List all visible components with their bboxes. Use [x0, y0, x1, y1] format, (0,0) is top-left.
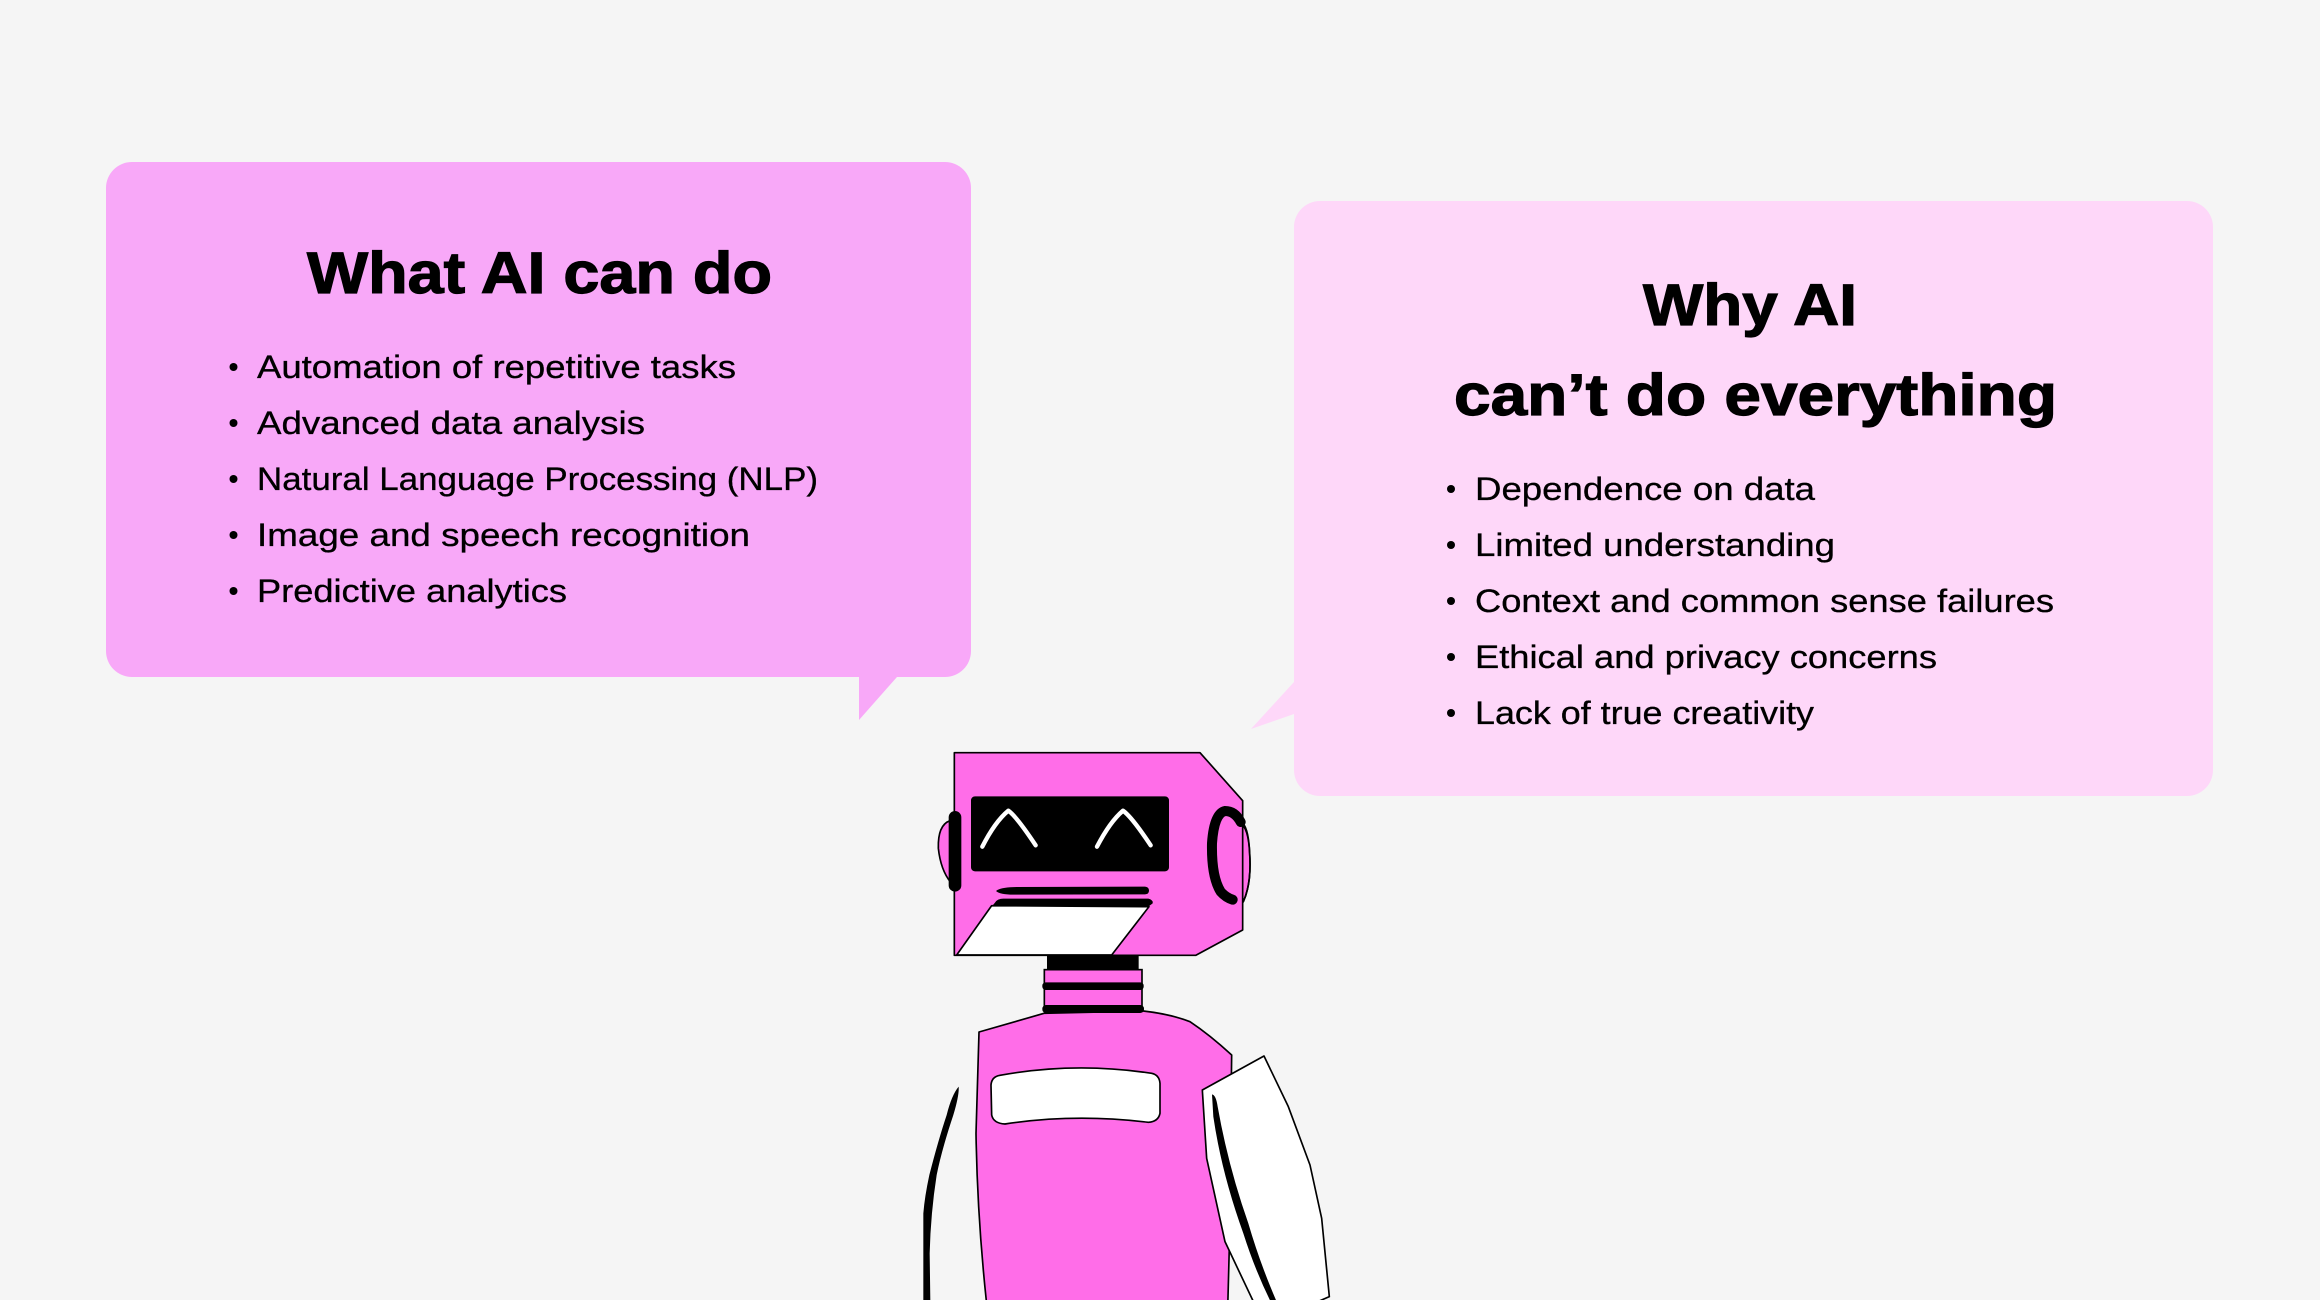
jaw — [957, 906, 1149, 955]
list: AI capabilities: Image and speech recognition — [257, 517, 750, 553]
neck band lower — [1042, 1005, 1144, 1013]
list: AI capabilities: Advanced data analysis — [257, 405, 645, 441]
list: AI capabilities — [230, 349, 818, 609]
list: AI limitations: Lack of true creativity — [1475, 695, 1814, 731]
speech bubble: why AI can't do everything — [1251, 201, 2213, 796]
right eye — [1097, 811, 1151, 847]
chest plate — [991, 1068, 1160, 1124]
list: AI capabilities: Natural Language Processing (NLP) — [257, 461, 818, 497]
robot body — [923, 1011, 1329, 1300]
visor — [971, 796, 1169, 871]
robot illustration — [923, 753, 1329, 1300]
list: AI capabilities: Automation of repetitive tasks — [257, 349, 736, 385]
heading: why AI can't do everything: can’t do everything — [1454, 363, 2057, 428]
right ear ring — [1212, 811, 1241, 900]
right ear pad overlap — [1243, 823, 1250, 902]
list: AI limitations: Dependence on data — [1475, 471, 1815, 507]
right ear — [1233, 823, 1250, 902]
robot head and neck — [938, 753, 1250, 1013]
heading: what AI can do: What AI can do — [307, 241, 772, 306]
neck band upper — [1042, 982, 1144, 990]
list: AI limitations: Limited understanding — [1475, 527, 1835, 563]
neck collar — [1044, 970, 1142, 1011]
panel: why AI can't do everything — [1251, 201, 2213, 796]
right arm line — [1212, 1094, 1277, 1300]
head shell — [954, 753, 1243, 955]
panel: what AI can do — [106, 162, 971, 720]
left eye — [982, 811, 1036, 847]
heading: why AI can't do everything: Why AI — [1643, 273, 1857, 338]
left ear — [938, 821, 951, 882]
heading: why AI can't do everything — [1454, 273, 2057, 428]
list: AI limitations — [1447, 471, 2054, 731]
mouth line upper — [996, 887, 1149, 895]
list: AI limitations: Context and common sense failures — [1475, 583, 2054, 619]
speech bubble: what AI can do — [106, 162, 971, 720]
neck base — [1047, 956, 1139, 970]
left arm line — [923, 1087, 959, 1300]
list: AI capabilities: Predictive analytics — [257, 573, 567, 609]
right arm sleeve — [1202, 1056, 1329, 1300]
torso — [976, 1011, 1232, 1300]
mouth line lower — [992, 899, 1153, 907]
list: AI limitations: Ethical and privacy concerns — [1475, 639, 1937, 675]
left ear clamp — [949, 811, 961, 892]
